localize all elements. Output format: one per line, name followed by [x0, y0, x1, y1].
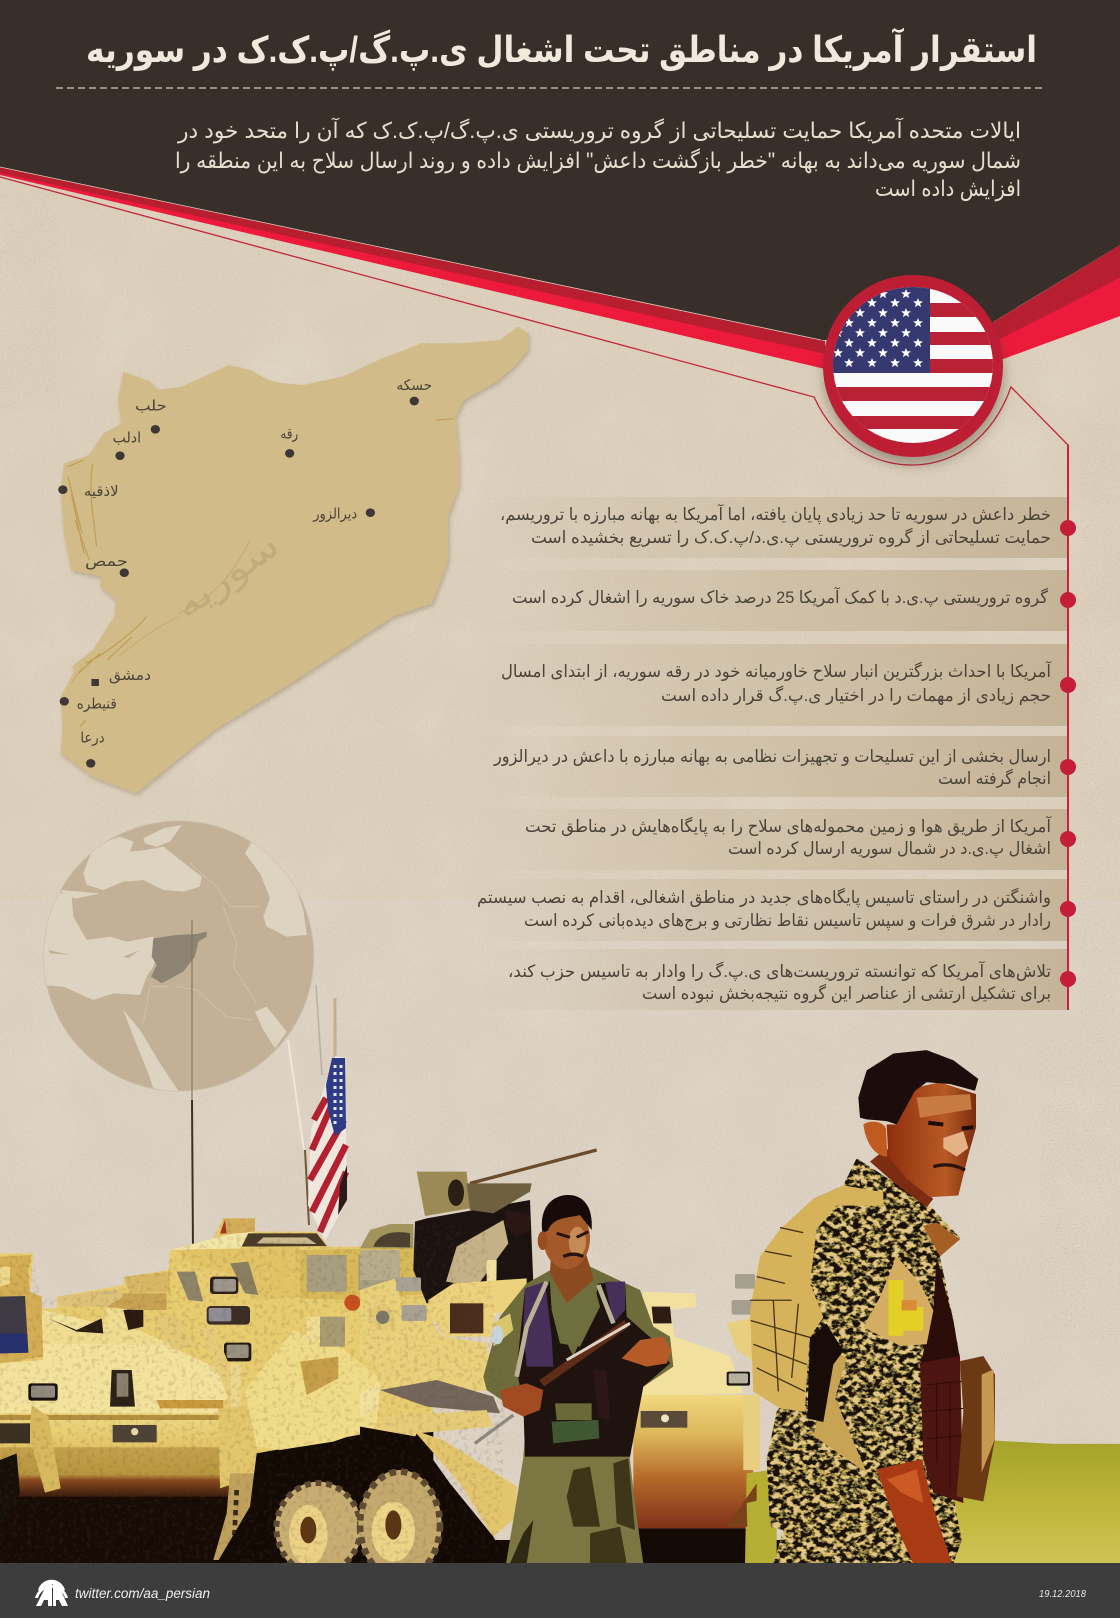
waving US flag	[308, 1056, 347, 1241]
item texts: آمریکا با احداث بزرگترین انبار سلاح خاورمیانه خود در رقه سوریه، از ابتدای امسال	[501, 660, 1052, 682]
standing soldier	[475, 1195, 673, 1563]
item texts: آمریکا از طریق هوا و زمین محموله‌های سلاح را به پایگاه‌هایش در مناطق تحت	[525, 815, 1052, 837]
dashed divider	[56, 87, 1045, 89]
red ribbon right	[990, 245, 1120, 360]
left vehicles	[0, 1218, 433, 1575]
item texts: رادار در شرق فرات و سپس تاسیس نقاط نظارتی و برج‌های دیده‌بانی کرده است	[524, 911, 1051, 931]
dark ground strip	[0, 1540, 780, 1564]
forearm	[877, 1459, 952, 1564]
antennas and poles	[192, 920, 335, 1250]
side pouch	[957, 1356, 995, 1501]
face	[887, 1082, 976, 1197]
chest armor	[920, 1356, 963, 1503]
dark header panel	[0, 0, 1120, 340]
intro text: افزایش داده است	[875, 176, 1021, 202]
item texts: ارسال بخشی از این تسلیحات و تجهیزات نظامی به بهانه مبارزه با داعش در دیرالزور	[493, 747, 1051, 767]
item texts: انجام گرفته است	[938, 768, 1051, 788]
map labels: دیرالزور	[312, 506, 357, 523]
turret, gunner and right vehicle	[358, 1150, 770, 1580]
intro text: ایالات متحده آمریکا حمایت تسلیحاتی از گروه تروریستی ی.پ.گ/پ.ک.ک که آن را متحد خود در	[177, 117, 1021, 143]
item texts: خطر داعش در سوریه تا حد زیادی پایان یافته، اما آمریکا به بهانه مبارزه با تروریسم،	[500, 503, 1051, 525]
item bands	[470, 497, 1067, 1010]
grass field	[747, 1441, 1120, 1564]
icon: US flag medallion	[823, 275, 1004, 465]
map labels: حمص	[85, 553, 128, 570]
camouflage uniform	[767, 1158, 962, 1564]
intro text: شمال سوریه می‌داند به بهانه "خطر بازگشت داعش" افزایش داده و روند ارسال سلاح به این منطقه را	[175, 148, 1021, 174]
globe locator	[40, 821, 314, 1093]
photo grain overlay	[0, 1218, 510, 1563]
item texts: اشغال پ.ی.د در شمال سوریه ارسال کرده است	[728, 839, 1051, 859]
map of Syria	[58, 327, 530, 796]
map labels: درعا	[80, 730, 105, 747]
right vehicle	[633, 1292, 743, 1397]
plate carrier vest	[750, 1185, 883, 1412]
item texts: واشنگتن در راستای تاسیس پایگاه‌های جدید در مناطق اشغالی، اقدام به نصب سیستم	[477, 887, 1051, 908]
dark side stripe	[920, 1256, 960, 1366]
collar	[923, 1223, 960, 1256]
ear	[863, 1122, 887, 1157]
item texts: حمایت تسلیحاتی از گروه تروریستی پ.ی.د/پ.ک.ک را تسریع بخشیده است	[531, 527, 1051, 548]
map labels: رقه	[280, 426, 298, 443]
torso gap	[807, 1324, 843, 1422]
item texts	[477, 503, 1052, 1003]
footer date: 19.12.2018	[1039, 1588, 1086, 1600]
icon: AA logo	[35, 1580, 68, 1606]
item texts: تلاش‌های آمریکا که توانسته تروریست‌های ی.پ.گ را وادار به تاسیس حزب کند،	[508, 960, 1051, 982]
timeline line	[1067, 445, 1069, 1010]
item texts: گروه تروریستی پ.ی.د با کمک آمریکا 25 درصد خاک سوریه را اشغال کرده است	[512, 586, 1049, 608]
shoulder patch	[863, 1256, 933, 1346]
photo: armored vehicles	[0, 1150, 780, 1580]
footer twitter handle: twitter.com/aa_persian	[75, 1586, 210, 1601]
list of key points	[470, 445, 1076, 1010]
neck	[870, 1148, 933, 1207]
intro text	[175, 117, 1021, 202]
map labels: حلب	[135, 398, 167, 415]
map labels: لاذقیه	[84, 483, 119, 500]
map labels: قنیطره	[77, 696, 117, 712]
map terrain	[68, 419, 454, 727]
item texts: برای تشکیل ارتشی از عناصر این گروه نتیجه‌بخش نبوده است	[642, 983, 1051, 1003]
photo: soldier in camouflage	[750, 1050, 995, 1564]
item texts: حجم زیادی از مهمات را در اختیار ی.پ.گ قرار داده است	[661, 685, 1051, 706]
thin red connector line	[0, 177, 1068, 1010]
map labels	[77, 377, 432, 747]
map labels: ادلب	[112, 430, 141, 447]
footer bar	[0, 1563, 1120, 1618]
wheels	[275, 1482, 362, 1575]
map labels: دمشق	[109, 667, 151, 684]
red ribbon left	[0, 167, 825, 369]
map cities	[58, 397, 419, 768]
hair	[858, 1050, 978, 1124]
timeline dots	[1060, 520, 1076, 987]
map labels: حسکه	[396, 377, 432, 394]
map watermark: سوریه	[165, 525, 288, 627]
